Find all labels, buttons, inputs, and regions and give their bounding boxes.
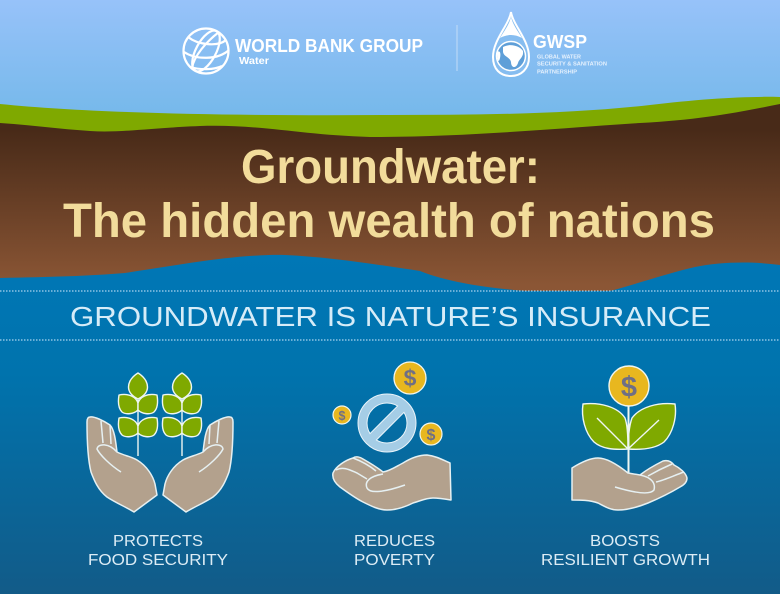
GWSP full name: SECURITY & SANITATION — [537, 62, 607, 68]
small coin — [333, 406, 351, 424]
leaves — [582, 404, 676, 449]
title — [63, 141, 715, 248]
label: reduces poverty: REDUCES — [354, 533, 435, 550]
icon: hand with prohibited coins — [333, 362, 451, 510]
small coin: $ — [339, 409, 346, 423]
GWSP full name: GLOBAL WATER — [537, 54, 581, 60]
stem — [628, 404, 630, 476]
label: protects food security — [88, 533, 228, 569]
grass band — [0, 97, 780, 137]
logo: GWSP — [493, 12, 607, 76]
label: boosts resilient growth: RESILIENT GROWTH — [541, 552, 710, 569]
World Bank Group wordmark: WORLD BANK GROUP — [235, 35, 423, 56]
label: protects food security: PROTECTS — [113, 533, 203, 550]
label: boosts resilient growth — [541, 533, 710, 569]
icon: hands with wheat — [87, 373, 233, 512]
dotted divider top — [0, 290, 780, 292]
logo divider — [456, 25, 458, 71]
groundwater body — [0, 255, 780, 594]
GWSP full name: PARTNERSHIP — [537, 70, 578, 76]
sky background — [0, 0, 780, 135]
icon: water drop globe — [493, 12, 529, 76]
medium coin: $ — [427, 427, 436, 444]
medium coin — [420, 423, 442, 445]
hand — [572, 458, 687, 510]
title: The hidden wealth of nations — [63, 195, 715, 248]
prohibition sign — [362, 398, 412, 448]
icon: hand with growing coin plant — [572, 366, 687, 510]
label: reduces poverty — [354, 533, 435, 569]
label: reduces poverty: POVERTY — [354, 552, 435, 569]
icon: globe — [184, 26, 229, 76]
dotted divider bottom — [0, 339, 780, 341]
large coin: $ — [404, 365, 417, 391]
coin — [609, 366, 649, 406]
left and right hands — [87, 417, 157, 512]
wheat stalks — [118, 373, 202, 456]
Water sublabel: Water — [239, 55, 269, 67]
subtitle: GROUNDWATER IS NATURE’S INSURANCE — [70, 301, 711, 332]
title: Groundwater: — [241, 141, 540, 194]
large coin — [394, 362, 426, 394]
coin: $ — [621, 372, 637, 404]
label: boosts resilient growth: BOOSTS — [590, 533, 660, 550]
logo: World Bank Group — [184, 26, 423, 76]
hand — [333, 455, 451, 510]
GWSP wordmark: GWSP — [533, 32, 587, 52]
soil band — [0, 100, 780, 300]
GWSP full name — [537, 54, 607, 76]
label: protects food security: FOOD SECURITY — [88, 552, 228, 569]
